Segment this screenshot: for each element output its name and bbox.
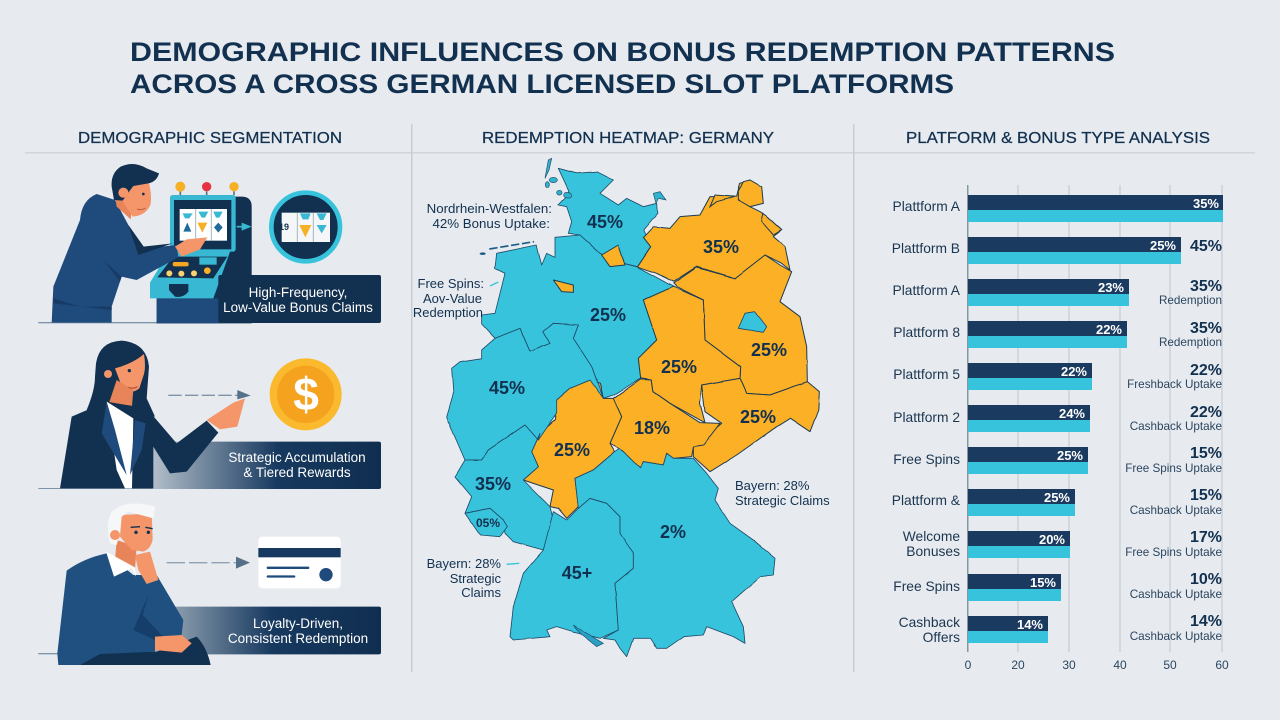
bar row 11: Cashback Uptake — [1130, 630, 1222, 643]
map percent labels — [475, 212, 787, 583]
map percent labels: 45+ — [562, 563, 592, 583]
region: Sachsen — [693, 378, 819, 472]
bar row 9: 17% — [1190, 529, 1222, 546]
region: Niedersachsen — [482, 235, 673, 398]
bar row 6: Plattform 2 — [893, 410, 960, 425]
panel: persona high-frequency — [38, 164, 381, 323]
heading: redemption heatmap: REDEMPTION HEATMAP: GERMANY — [482, 130, 774, 147]
title: DEMOGRAPHIC INFLUENCES ON BONUS REDEMPTION PATTERNS — [130, 37, 1115, 67]
callout: Bayern right: Bayern: 28% — [735, 478, 810, 493]
bar row 4: 22% — [1096, 322, 1122, 337]
banner: loyalty — [140, 607, 381, 654]
bar row 5: Plattform 5 — [893, 367, 960, 382]
title — [130, 37, 1115, 99]
bar row 2 — [892, 237, 1222, 264]
bar row 5: 22% — [1061, 364, 1087, 379]
map percent labels: 35% — [475, 474, 511, 494]
region: Saarland — [465, 508, 507, 537]
panel: persona strategic — [38, 341, 381, 489]
map percent labels: 18% — [634, 418, 670, 438]
callout: free spins: Redemption — [413, 305, 483, 320]
icon: dollar coin — [270, 358, 342, 430]
bar row 10: Free Spins — [893, 579, 960, 594]
caption: strategic — [228, 450, 366, 480]
bar row 8: 25% — [1044, 490, 1070, 505]
map percent labels: 25% — [661, 357, 697, 377]
callout: Bayern left: Strategic — [450, 571, 501, 586]
map regions — [447, 158, 819, 657]
islands: baltic coast — [710, 180, 782, 235]
x axis labels — [965, 658, 1229, 672]
bar row 10 — [893, 571, 1222, 601]
bar row 1: Plattform A — [893, 199, 961, 214]
bar row 4: Redemption — [1159, 336, 1222, 349]
map percent labels: 05% — [476, 516, 500, 530]
bar row 6: Cashback Uptake — [1130, 420, 1222, 433]
x axis labels: 30 — [1062, 658, 1076, 672]
region: Baden-Wuerttemberg — [510, 498, 633, 640]
bar row 2: 25% — [1150, 238, 1176, 253]
bar row 9: Bonuses — [906, 544, 960, 559]
bar row 11: 14% — [1017, 617, 1043, 632]
icon: loyalty card — [258, 537, 341, 588]
bar row 1: 35% — [1193, 196, 1219, 211]
icon: reels badge — [271, 193, 340, 261]
bar row 7: 25% — [1057, 448, 1083, 463]
bar row 9: 20% — [1039, 532, 1065, 547]
islands: frisian dashes — [480, 242, 534, 255]
bar row 5: 22% — [1190, 362, 1222, 379]
map: Germany heatmap — [447, 158, 819, 657]
bar chart: platform and bonus type — [892, 185, 1229, 672]
bar row 4: 35% — [1190, 320, 1222, 337]
tick: free spins — [490, 282, 498, 286]
bar row 9: Welcome — [903, 529, 960, 544]
bar row 2: Plattform B — [892, 241, 960, 256]
bar row 6 — [893, 404, 1222, 433]
caption: loyalty: Loyalty-Driven, — [253, 616, 343, 631]
callout: Bayern left: Bayern: 28% — [427, 556, 501, 571]
panel: persona high-frequency: 19 — [279, 222, 289, 232]
arrow: to card — [167, 557, 250, 569]
callout: Bayern left: Claims — [461, 585, 501, 600]
bar row 7: Free Spins Uptake — [1125, 462, 1222, 475]
map percent labels: 2% — [660, 522, 686, 542]
callout: Bayern right — [735, 478, 830, 508]
region: Schleswig-Holstein — [558, 168, 657, 267]
region: Thueringen — [610, 379, 720, 468]
map percent labels: 35% — [703, 237, 739, 257]
caption: high-frequency: Low-Value Bonus Claims — [223, 300, 373, 315]
x axis labels: 20 — [1011, 658, 1025, 672]
bar row 3 — [893, 278, 1222, 307]
icon: Bodensee lake — [573, 625, 603, 647]
arrow: to coin — [168, 390, 251, 399]
region: Bayern — [575, 448, 775, 657]
caption: strategic: & Tiered Rewards — [243, 465, 351, 480]
x axis labels: 50 — [1163, 658, 1177, 672]
map percent labels: 25% — [751, 340, 787, 360]
bar row 10: Cashback Uptake — [1130, 588, 1222, 601]
map percent labels: 25% — [740, 407, 776, 427]
bar row 4: Plattform 8 — [893, 325, 960, 340]
region: Hessen — [523, 380, 622, 518]
panel: persona strategic: $ — [293, 368, 319, 420]
x axis labels: 0 — [965, 658, 972, 672]
region: Rheinland-Pfalz — [455, 425, 553, 550]
bar row 9 — [903, 529, 1222, 559]
bar row 6: 24% — [1059, 406, 1085, 421]
map percent labels: 25% — [590, 305, 626, 325]
bar row 11: Cashback — [899, 615, 960, 630]
bar row 11: Offers — [923, 630, 960, 645]
callout: Bayern left — [427, 556, 501, 600]
map percent labels: 45% — [489, 378, 525, 398]
tick: bayern — [507, 563, 519, 564]
bar row 9: Free Spins Uptake — [1125, 546, 1222, 559]
bar row 8: Cashback Uptake — [1130, 504, 1222, 517]
bar row 7 — [893, 445, 1222, 475]
islands: north sea — [545, 158, 666, 203]
bar row 5 — [893, 362, 1222, 391]
region: Berlin — [738, 312, 767, 332]
region: Mecklenburg-Vorpommern — [637, 180, 790, 282]
callout: Nordrhein-Westfalen: Nordrhein-Westfalen: — [427, 201, 552, 216]
caption: high-frequency: High-Frequency, — [249, 285, 347, 300]
bar row 3: Plattform A — [893, 283, 961, 298]
bar row 6: 22% — [1190, 404, 1222, 421]
bar row 5: Freshback Uptake — [1127, 378, 1222, 391]
caption: loyalty: Consistent Redemption — [228, 631, 368, 646]
x axis labels: 40 — [1113, 658, 1127, 672]
banner: high-frequency — [218, 275, 381, 323]
region: Brandenburg — [673, 255, 807, 395]
bar row 11 — [899, 613, 1222, 645]
region: Nordrhein-Westfalen — [447, 323, 603, 460]
bar row 3: 23% — [1098, 280, 1124, 295]
bar row 7: Free Spins — [893, 452, 960, 467]
bar row 10: 15% — [1030, 575, 1056, 590]
bar row 8: 15% — [1190, 487, 1222, 504]
figure: man in hoodie — [52, 164, 207, 323]
bar row 1 — [893, 195, 1223, 222]
bar row 8 — [892, 487, 1222, 517]
heading: platform and bonus type analysis: PLATFORM & BONUS TYPE ANALYSIS — [906, 130, 1210, 147]
bar row 2: 45% — [1190, 238, 1222, 255]
caption: loyalty — [228, 616, 368, 646]
caption: strategic: Strategic Accumulation — [228, 450, 366, 465]
map percent labels: 25% — [554, 440, 590, 460]
heading: demographic segmentation: DEMOGRAPHIC SEGMENTATION — [78, 130, 342, 147]
bar row 11: 14% — [1190, 613, 1222, 630]
x axis labels: 60 — [1215, 658, 1229, 672]
bar row 8: Plattform & — [892, 493, 960, 508]
bar row 3: Redemption — [1159, 294, 1222, 307]
map percent labels: 45% — [587, 212, 623, 232]
bar row 7: 15% — [1190, 445, 1222, 462]
callout: Bayern right: Strategic Claims — [735, 493, 830, 508]
callout: free spins: Aov-Value — [423, 291, 482, 306]
bar row 10: 10% — [1190, 571, 1222, 588]
title: ACROS A CROSS GERMAN LICENSED SLOT PLATFORMS — [130, 69, 954, 99]
bar row 3: 35% — [1190, 278, 1222, 295]
region: Hamburg — [602, 245, 625, 267]
icon: slot machine — [150, 182, 252, 323]
banner: strategic — [152, 442, 381, 489]
panel: persona loyalty — [38, 503, 381, 665]
figure: woman pointing — [60, 341, 245, 488]
callout: free spins: Free Spins: — [418, 276, 484, 291]
caption: high-frequency — [223, 285, 373, 315]
region: Sachsen-Anhalt — [638, 287, 741, 423]
callout: Nordrhein-Westfalen: 42% Bonus Uptake: — [432, 216, 550, 231]
bar row 4 — [893, 320, 1222, 349]
callout: free spins — [413, 276, 484, 320]
figure: older man thinking — [57, 503, 211, 665]
callout: Nordrhein-Westfalen — [427, 201, 552, 231]
region: Bremen — [553, 280, 573, 292]
